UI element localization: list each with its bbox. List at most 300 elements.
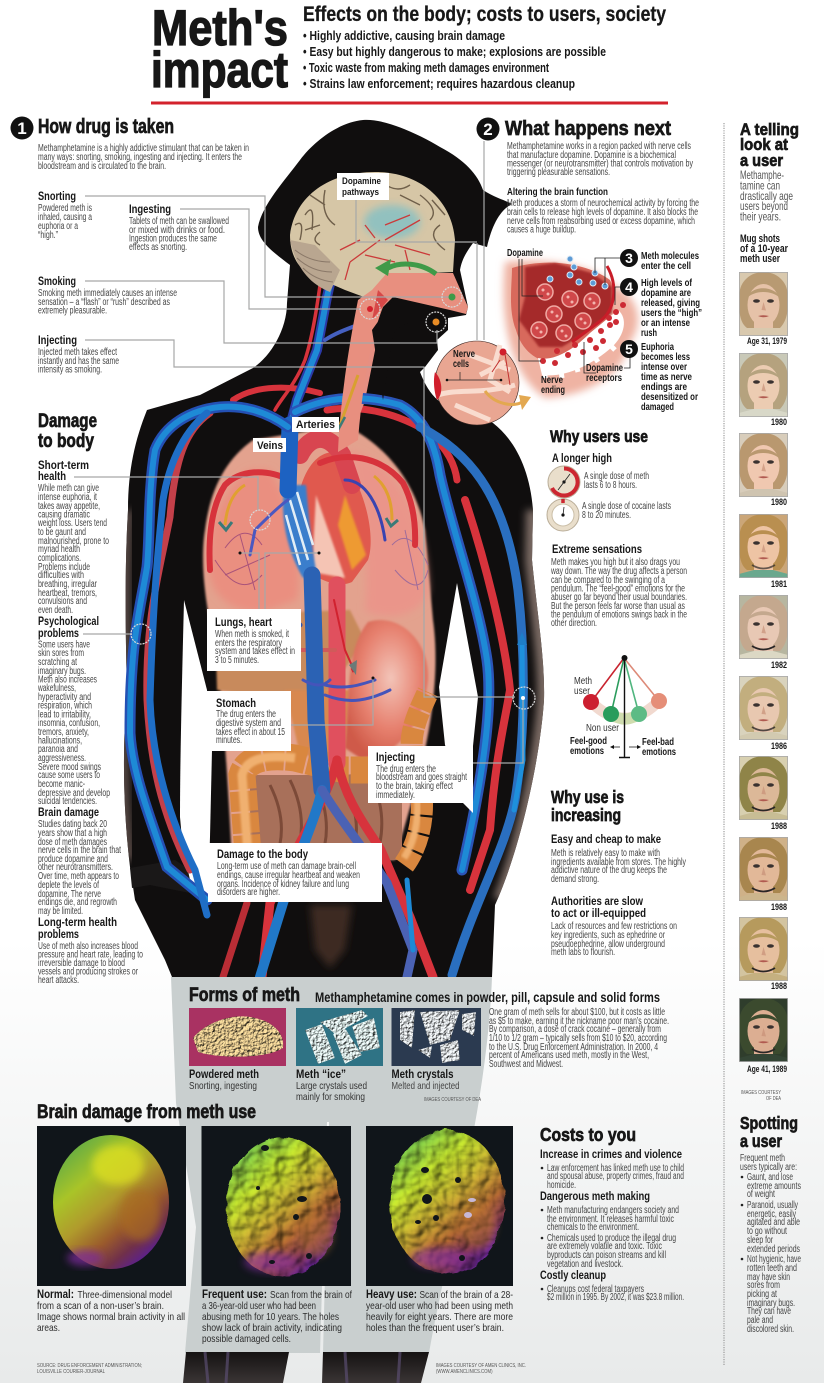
amen clinics credit: (WWW.AMENCLINICS.COM) bbox=[436, 1369, 493, 1375]
section: why users use: 8 to 20 minutes. bbox=[582, 510, 631, 521]
step 4: High levels of bbox=[641, 277, 692, 289]
callout: injecting: Injecting bbox=[376, 750, 415, 764]
psychological problems: Psychological bbox=[38, 614, 99, 628]
section: brain damage from meth use bbox=[37, 1102, 526, 1375]
subtitle and key points: • Easy but highly dangerous to make; explosions are possible bbox=[303, 45, 606, 59]
step 5: intense over bbox=[641, 361, 687, 373]
altering the brain function: Meth produces a storm of neurochemical activity by forcing the bbox=[507, 198, 699, 209]
step 3: enter the cell bbox=[641, 260, 691, 272]
psychological problems: Severe mood swings bbox=[38, 762, 101, 773]
short-term health: convulsions and bbox=[38, 596, 87, 607]
easy and cheap: Easy and cheap to make bbox=[551, 832, 661, 846]
caption: ice: Large crystals used bbox=[296, 1080, 367, 1092]
intro: tamine can bbox=[740, 178, 780, 192]
image credit: OF DEA bbox=[766, 1096, 782, 1102]
psychological problems: cause some users to bbox=[38, 770, 100, 781]
dangerous meth making bbox=[540, 1189, 679, 1270]
brain damage bbox=[38, 805, 121, 917]
step 5: damaged bbox=[641, 401, 674, 413]
step 4: rush bbox=[641, 327, 657, 339]
psychological problems: respiration, which bbox=[38, 700, 92, 712]
step 4: or an intense bbox=[641, 317, 690, 329]
caption: crystals: Meth crystals bbox=[392, 1067, 454, 1081]
section: how drug is taken bbox=[10, 116, 249, 376]
heading: a user bbox=[740, 1131, 782, 1151]
subtitle and key points: • Toxic waste from making meth damages environment bbox=[303, 61, 550, 75]
caption: frequent: abusing meth for 10 years. The holes bbox=[202, 1311, 339, 1323]
bracelet on wrist bbox=[130, 860, 190, 893]
list: sleep for bbox=[747, 1235, 773, 1246]
increase in crimes: Law enforcement has linked meth use to child bbox=[547, 1163, 684, 1174]
snorting: Snorting bbox=[38, 189, 76, 203]
caption: heavy: year-old user who had been using meth bbox=[366, 1300, 513, 1312]
caption: frequent: a 36-year-old user who had been bbox=[202, 1300, 316, 1312]
nerve cells magnifier bbox=[434, 341, 531, 425]
brain damage: may be limited. bbox=[38, 906, 83, 917]
price text: By comparison, a dose of crack cocaine – generally from bbox=[489, 1024, 661, 1035]
callout: stomach bbox=[207, 691, 291, 751]
heading: Spotting bbox=[740, 1113, 798, 1133]
callout: lungs, heart: system and takes effect in bbox=[215, 646, 295, 657]
callout: injecting: The drug enters the bbox=[376, 764, 436, 775]
nerve cells label bbox=[453, 349, 475, 370]
extreme sensations: can be compared to the swinging of a bbox=[551, 575, 665, 586]
heading: increasing bbox=[551, 805, 621, 825]
pendulum diagram: Feel-bad bbox=[642, 737, 674, 748]
pendulum diagram: Non user bbox=[586, 723, 620, 734]
brain damage: Over time, meth appears to bbox=[38, 871, 119, 882]
subtitle and key points: • Highly addictive, causing brain damage bbox=[303, 29, 505, 43]
snorting: Powdered meth is bbox=[38, 203, 92, 214]
pink halo bbox=[504, 261, 638, 398]
snorting: euphoria or a bbox=[38, 221, 78, 232]
callout: stomach: The drug enters the bbox=[216, 709, 276, 720]
caption: frequent bbox=[202, 1289, 352, 1345]
extreme sensations bbox=[550, 542, 687, 629]
step 4: released, giving bbox=[641, 297, 700, 309]
arteries bbox=[147, 200, 510, 977]
list: to go without bbox=[747, 1226, 787, 1237]
mug shots heading: of a 10-year bbox=[740, 243, 789, 255]
psychological problems: imaginary bugs. bbox=[38, 666, 86, 677]
costly cleanup: Cleanups cost federal taxpayers bbox=[547, 1284, 644, 1295]
intro: drastically age bbox=[740, 189, 793, 203]
nerve ending label: ending bbox=[541, 385, 565, 396]
costly cleanup: $2 million in 1995. By 2002, it was $23.8 million. bbox=[547, 1292, 684, 1303]
psychological problems: skin sores from bbox=[38, 648, 84, 659]
step 5: Euphoria bbox=[641, 341, 674, 353]
price text: as $5 to make, earning it the nickname poor man’s cocaine. bbox=[489, 1016, 669, 1027]
dangerous meth making: Chemicals used to produce the illegal drug bbox=[547, 1233, 676, 1244]
caption: frequent: show lack of brain activity, indicating bbox=[202, 1322, 342, 1334]
leg bottoms bbox=[183, 1352, 429, 1383]
caption: heavy: Scan of the brain of a 28- bbox=[420, 1289, 513, 1301]
caption: heavy: heavily for eight years. There are more bbox=[366, 1311, 513, 1323]
heading: How drug is taken bbox=[38, 116, 174, 138]
authorities: Lack of resources and few restrictions on bbox=[551, 921, 677, 932]
list: extreme amounts bbox=[747, 1181, 801, 1192]
torso organs bbox=[203, 425, 436, 865]
callout: stomach: minutes. bbox=[216, 735, 242, 746]
psychological problems: become manic- bbox=[38, 779, 85, 790]
gap between left arm and torso bbox=[180, 600, 212, 900]
orange arrow to cell bbox=[485, 391, 522, 404]
heart bbox=[292, 453, 371, 584]
intro: users beyond bbox=[740, 199, 788, 213]
section: damage to body bbox=[37, 411, 143, 986]
section: costs to you bbox=[540, 1124, 684, 1303]
callout: stomach: Stomach bbox=[216, 696, 256, 710]
extreme sensations: way down. The way the drug affects a person bbox=[550, 566, 687, 577]
legs ghost panel bbox=[171, 977, 492, 1353]
brain damage: produce dopamine and bbox=[38, 854, 108, 865]
list: rotten teeth and bbox=[747, 1263, 797, 1274]
increase in crimes: homicide. bbox=[547, 1180, 576, 1191]
increase in crimes: Increase in crimes and violence bbox=[540, 1147, 682, 1161]
heading: What happens next bbox=[505, 118, 671, 140]
callout: damage to the body: organs. Incidence of kidney failure and lung bbox=[217, 879, 349, 890]
list: Paranoid, usually bbox=[747, 1200, 798, 1211]
dangerous meth making: chemicals to the environment. bbox=[547, 1222, 639, 1233]
extreme sensations: the pendulum of emotions swings back in the bbox=[551, 610, 687, 620]
caption: ice: Meth “ice” bbox=[296, 1067, 346, 1081]
callout: damage to the body: disorders are higher. bbox=[217, 887, 280, 898]
snorting: “high.” bbox=[38, 230, 58, 241]
authorities: to act or ill-equipped bbox=[551, 906, 646, 920]
long-term health problems: Long-term health bbox=[38, 915, 117, 929]
section: why users use: lasts 6 to 8 hours. bbox=[584, 480, 637, 491]
caption: ice: mainly for smoking bbox=[296, 1091, 365, 1103]
meth molecules bbox=[547, 256, 608, 289]
section: spotting a user bbox=[740, 1113, 801, 1335]
caption: powdered: Powdered meth bbox=[189, 1067, 259, 1081]
mug shots heading: meth user bbox=[740, 253, 781, 265]
dangerous meth making: the environment. It releases harmful toxic bbox=[547, 1214, 674, 1225]
brain damage: deplete the levels of bbox=[38, 880, 99, 891]
smoking: Smoking meth immediately causes an intense bbox=[38, 288, 177, 299]
step 5: 5 bbox=[625, 341, 633, 357]
extreme sensations: pendulum. The “feel-good” emotions for the bbox=[551, 584, 685, 594]
ingesting: effects as snorting. bbox=[129, 242, 187, 253]
short-term health: weight loss. Users tend bbox=[37, 518, 107, 529]
caption: frequent: Scan from the brain of bbox=[270, 1289, 352, 1301]
callout: damage to the body: Long-term use of meth can damage brain-cell bbox=[217, 861, 356, 872]
long-term health problems: irreversible damage to blood bbox=[38, 958, 125, 969]
heading: look at bbox=[740, 135, 788, 154]
mug shot captions: 1988 bbox=[771, 902, 787, 912]
psychological problems bbox=[37, 614, 110, 807]
orange pathway arrow bbox=[340, 375, 358, 425]
caption: heavy: holes than the frequent user’s brain. bbox=[366, 1322, 504, 1334]
short-term health: to be gaunt and bbox=[38, 527, 86, 538]
heading: Why users use bbox=[550, 427, 648, 446]
step 5: becomes less bbox=[641, 351, 690, 363]
list: may have skin bbox=[747, 1272, 790, 1283]
long-term health problems: pressure and heart rate, leading to bbox=[38, 950, 143, 960]
psychological problems: insomnia, confusion, bbox=[38, 718, 100, 729]
number 2 badge bbox=[476, 118, 500, 140]
psychological problems: Some users have bbox=[38, 640, 90, 650]
easy and cheap: addictive nature of the drug keeps the bbox=[551, 865, 667, 876]
sinus and throat bbox=[338, 273, 468, 452]
caption: frequent: Frequent use: bbox=[202, 1289, 267, 1301]
title bbox=[151, 0, 288, 98]
source credit: SOURCE: DRUG ENFORCEMENT ADMINISTRATION; bbox=[37, 1363, 142, 1369]
amen clinics credit: IMAGES COURTESY OF AMEN CLINICS, INC. bbox=[436, 1363, 526, 1369]
psychological problems: hallucinations, bbox=[38, 736, 82, 746]
long-term health problems: vessels and producing strokes or bbox=[38, 966, 138, 978]
easy and cheap: demand strong. bbox=[551, 874, 599, 885]
short-term health: malnourished, prone to bbox=[38, 536, 109, 547]
intro text bbox=[507, 141, 693, 178]
intro text: bloodstream and is circulated to the brain. bbox=[38, 161, 166, 172]
authorities: meth labs to flourish. bbox=[551, 947, 615, 958]
mug shot captions: 1980 bbox=[771, 417, 787, 427]
green arrow bbox=[388, 264, 436, 274]
step 5: time as nerve bbox=[641, 371, 692, 383]
list bbox=[740, 1153, 801, 1335]
step 3: 3 bbox=[625, 250, 633, 266]
short-term health: intense euphoria, it bbox=[38, 492, 97, 503]
extreme sensations: Extreme sensations bbox=[552, 542, 642, 556]
list: energetic, easily bbox=[747, 1209, 796, 1220]
pendulum diagram: Meth bbox=[574, 676, 592, 687]
psychological problems: suicidal tendencies. bbox=[38, 796, 97, 807]
mug shot captions: 1986 bbox=[771, 741, 787, 751]
source credit bbox=[37, 1363, 142, 1375]
brain bbox=[290, 172, 468, 452]
subtitle and key points bbox=[303, 3, 666, 91]
step 3 bbox=[620, 249, 699, 272]
mug shot 1981 bbox=[739, 514, 788, 578]
dangerous meth making: Dangerous meth making bbox=[540, 1189, 650, 1203]
label: dopamine pathways: pathways bbox=[342, 187, 379, 198]
ingesting: Ingesting bbox=[129, 202, 171, 216]
smoking: extremely pleasurable. bbox=[38, 306, 107, 316]
heading bbox=[38, 411, 97, 452]
clock: meth bbox=[548, 466, 580, 498]
callout: injecting: immediately. bbox=[376, 790, 415, 801]
step 4: 4 bbox=[625, 279, 633, 295]
left lung bbox=[209, 470, 299, 612]
short-term health: causing dramatic bbox=[38, 510, 90, 520]
pendulum diagram bbox=[570, 655, 676, 758]
mug shot 1979 bbox=[739, 272, 788, 336]
pendulum diagram: emotions bbox=[570, 746, 604, 757]
lower centre of hips bbox=[310, 905, 352, 968]
list: users typically are: bbox=[740, 1162, 797, 1173]
short-term health: Short-term bbox=[38, 458, 89, 472]
title: impact bbox=[151, 42, 288, 98]
mug shot 1988 c bbox=[739, 917, 788, 981]
heading: Damage bbox=[38, 411, 97, 432]
heading bbox=[740, 120, 799, 170]
callout: lungs, heart bbox=[207, 609, 301, 671]
heading: A telling bbox=[740, 120, 799, 139]
price text: to the U.S. Drug Enforcement Administration. In 2000, 4 bbox=[489, 1042, 658, 1053]
intro text: many ways: snorting, smoking, ingesting and injecting. It enters the bbox=[38, 152, 242, 163]
authorities: key ingredients, such as ephedrine or bbox=[551, 930, 665, 941]
callout: damage to the body: Damage to the body bbox=[217, 847, 308, 861]
dangerous meth making: byproducts can poison streams and kill bbox=[547, 1250, 666, 1261]
caption: ice bbox=[296, 1067, 367, 1103]
intro text: Methamphetamine works in a region packed with nerve cells bbox=[507, 141, 691, 152]
psychological problems: problems bbox=[38, 626, 79, 640]
caption: heavy bbox=[366, 1289, 513, 1334]
mug shot captions: 1988 bbox=[771, 981, 787, 991]
brain damage: Studies dating back 20 bbox=[38, 819, 107, 830]
caption: frequent: possible damaged cells. bbox=[202, 1333, 291, 1345]
scan: normal bbox=[37, 1126, 186, 1286]
short-term health: While meth can give bbox=[38, 483, 99, 494]
price text: 1/10 to 1/2 gram – typically sells from $10 to $20, according bbox=[489, 1033, 667, 1044]
caption: heavy: Heavy use: bbox=[366, 1289, 417, 1301]
short-term health: takes away appetite, bbox=[38, 501, 100, 512]
snorting bbox=[38, 189, 92, 241]
callout: stomach: takes effect in about 15 bbox=[216, 727, 285, 738]
callout: injecting: to the brain, taking effect bbox=[376, 781, 453, 792]
mug shot captions: Age 41, 1989 bbox=[747, 1064, 787, 1074]
long-term health problems: heart attacks. bbox=[38, 975, 79, 986]
cell body bbox=[511, 263, 613, 362]
list: of weight bbox=[747, 1189, 775, 1200]
injecting: intensity as smoking. bbox=[38, 364, 102, 376]
altering the brain function: nerve cells from reabsorbing used or excess dopamine, which bbox=[507, 216, 695, 227]
injecting: Injected meth takes effect bbox=[38, 347, 117, 358]
caption: powdered bbox=[189, 1067, 259, 1092]
short-term health: difficulties with bbox=[38, 570, 84, 581]
mug shot captions: 1988 bbox=[771, 821, 787, 831]
step 4: users the “high” bbox=[641, 307, 702, 319]
increase in crimes: and spousal abuse, property crimes, fraud and bbox=[547, 1171, 684, 1182]
psychological problems: wakefulness, bbox=[37, 683, 76, 694]
caption: normal: areas. bbox=[37, 1322, 60, 1334]
psychological problems: lead to irritability, bbox=[38, 710, 91, 720]
price text: percent of Americans used meth, mostly in the West, bbox=[489, 1050, 649, 1061]
brain damage: Brain damage bbox=[38, 805, 99, 819]
caption: normal: Image shows normal brain activity in all bbox=[37, 1311, 185, 1323]
psychological problems: hyperactivity and bbox=[38, 692, 91, 703]
callout: stomach: digestive system and bbox=[216, 718, 281, 729]
number 2 badge: 2 bbox=[483, 120, 493, 139]
mug shot 1988 bbox=[739, 756, 788, 820]
intro: Methamphe- bbox=[740, 168, 784, 182]
injecting: instantly and has the same bbox=[38, 356, 119, 367]
photo: crystals bbox=[392, 1008, 481, 1066]
subheading: A longer high bbox=[552, 451, 612, 465]
lung arrows bbox=[219, 476, 398, 672]
step 5: desensitized or bbox=[641, 391, 698, 403]
extreme sensations: abuser go far beyond their usual boundaries. bbox=[551, 592, 687, 603]
heading: Why use is bbox=[551, 787, 624, 807]
easy and cheap: Meth is relatively easy to make with bbox=[551, 848, 660, 859]
extreme sensations: But the person feels far worse than usual as bbox=[551, 601, 685, 612]
psychological problems: Meth also increases bbox=[38, 674, 97, 686]
label: dopamine pathways: Dopamine bbox=[342, 176, 381, 187]
easy and cheap: ingredients available from stores. The highly bbox=[551, 857, 686, 868]
list: Gaunt, and lose bbox=[747, 1172, 793, 1183]
section: why users use bbox=[547, 427, 687, 758]
long-term health problems: problems bbox=[38, 927, 79, 941]
ingesting: Tablets of meth can be swallowed bbox=[129, 216, 229, 227]
number 1 badge: 1 bbox=[17, 119, 27, 138]
caption: crystals bbox=[392, 1067, 460, 1092]
short-term health: Problems include bbox=[38, 562, 90, 573]
image credit bbox=[741, 1090, 782, 1102]
scan: heavy bbox=[366, 1126, 513, 1286]
dopamine receptors label bbox=[586, 363, 623, 384]
smoking bbox=[38, 274, 177, 316]
smoking: sensation – a “flash” or “rush” described as bbox=[38, 297, 170, 308]
ingesting: or mixed with drinks or food. bbox=[129, 225, 225, 236]
pendulum diagram: emotions bbox=[642, 747, 676, 758]
callout: damage to the body: endings, cause irregular heartbeat and weaken bbox=[217, 870, 360, 881]
callout: injecting bbox=[368, 746, 473, 813]
increase in crimes bbox=[540, 1147, 684, 1191]
caption: normal: Normal: bbox=[37, 1289, 74, 1301]
step 5: endings are bbox=[641, 381, 687, 393]
extreme sensations: Meth makes you high but it also drags you bbox=[551, 557, 680, 568]
liver and stomach bbox=[215, 610, 365, 700]
callout: lungs, heart: Lungs, heart bbox=[215, 615, 272, 629]
caption: normal: Three-dimensional model bbox=[78, 1289, 172, 1301]
brain damage: endings die, and regrowth bbox=[38, 897, 117, 908]
injecting: Injecting bbox=[38, 333, 77, 347]
gap between right arm and torso bbox=[439, 583, 478, 812]
mug shot 1982 bbox=[739, 595, 788, 659]
vesicles bbox=[531, 284, 600, 341]
callout: damage to the body bbox=[208, 843, 382, 902]
dangerous meth making: are extremely volatile and toxic. Toxic bbox=[547, 1241, 662, 1252]
mug shot captions: Age 31, 1979 bbox=[747, 336, 787, 346]
nerve cells label: cells bbox=[453, 359, 469, 370]
price text: One gram of meth sells for about $100, but it costs as little bbox=[489, 1007, 665, 1018]
dangerous meth making: vegetation and livestock. bbox=[547, 1259, 623, 1270]
heading: to body bbox=[38, 431, 94, 452]
psychological problems: paranoia and bbox=[38, 744, 78, 755]
psychological problems: scratching at bbox=[38, 657, 77, 668]
list: discolored skin. bbox=[747, 1324, 794, 1335]
dopamine receptors label: receptors bbox=[586, 373, 622, 384]
short-term health bbox=[37, 458, 109, 616]
step 4 bbox=[620, 277, 702, 339]
dopamine label: Dopamine bbox=[507, 247, 543, 259]
list: pale and bbox=[747, 1315, 773, 1326]
white receptor band bbox=[538, 310, 624, 375]
short-term health: breathing, irregular bbox=[38, 579, 97, 590]
subheading: Methamphetamine comes in powder, pill, capsule and solid forms bbox=[315, 990, 660, 1005]
smoking: Smoking bbox=[38, 274, 76, 288]
veins bbox=[130, 195, 523, 977]
intro text: Methamphetamine is a highly addictive stimulant that can be taken in bbox=[38, 143, 249, 154]
callout: lungs, heart: When meth is smoked, it bbox=[215, 629, 289, 640]
short-term health: myriad health bbox=[38, 544, 80, 555]
ingesting: Ingestion produces the same bbox=[129, 234, 217, 244]
altering the brain function: causes a huge buildup. bbox=[507, 224, 576, 236]
list: imaginary bugs. bbox=[747, 1298, 795, 1309]
credit: IMAGES COURTESY OF DEA bbox=[424, 1097, 482, 1103]
intro text: triggering pleasurable sensations. bbox=[507, 167, 610, 178]
subtitle and key points: Effects on the body; costs to users, society bbox=[303, 3, 666, 26]
label: veins: Veins bbox=[257, 440, 283, 452]
callout: lungs, heart: 3 to 5 minutes. bbox=[215, 655, 259, 666]
photo: ice bbox=[296, 1008, 383, 1066]
authorities: pseudoephedrine, allow underground bbox=[551, 939, 665, 950]
extreme sensations: other direction. bbox=[551, 618, 597, 629]
short-term health: heartbeat, tremors, bbox=[38, 588, 97, 599]
clock: cocaine bbox=[547, 499, 579, 531]
altering the brain function: brain cells to release high levels of dopamine. It also blocks the bbox=[507, 207, 698, 218]
